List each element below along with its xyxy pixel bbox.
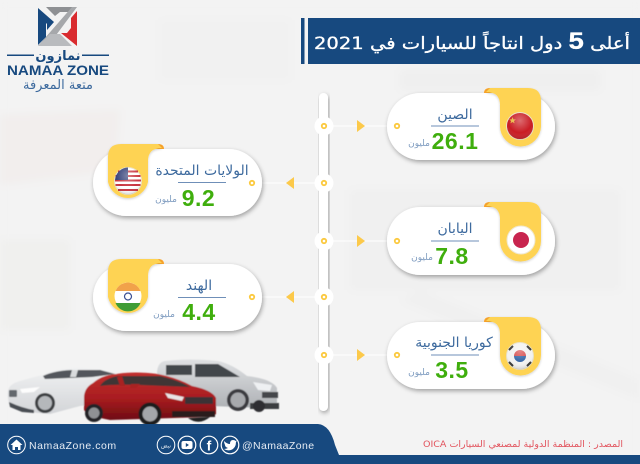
- ribbon: [484, 202, 541, 262]
- cars illustration: [8, 360, 279, 426]
- unit: مليون: [411, 253, 433, 263]
- icon: youtube: [178, 436, 196, 454]
- ribbon: [484, 317, 541, 375]
- value: 26.1: [432, 128, 478, 154]
- logo wordmark: NAMAA ZONE: [7, 63, 109, 78]
- logo tagline: متعة المعرفة: [23, 78, 93, 93]
- timeline nodes: [314, 116, 334, 364]
- flag: China: [506, 112, 534, 140]
- timeline spine: [314, 93, 334, 411]
- value: 4.4: [182, 299, 216, 325]
- card: South Korea: [387, 317, 555, 389]
- name: الصين: [437, 107, 473, 123]
- logo mark: [38, 7, 77, 46]
- unit: مليون: [408, 368, 430, 378]
- title text: أعلى 5 دول انتاجاً للسيارات في 2021: [314, 28, 630, 55]
- website link: NamaaZone.com: [29, 440, 117, 452]
- value: 9.2: [182, 185, 215, 211]
- ribbon: [108, 144, 164, 198]
- title banner: [301, 18, 640, 64]
- car: silver SUV: [157, 360, 279, 412]
- social handles: @NamaaZone: [242, 440, 314, 452]
- name: الولايات المتحدة: [155, 163, 249, 179]
- flag: USA: [114, 168, 142, 194]
- flag: India: [114, 282, 142, 311]
- ribbon: [484, 88, 541, 146]
- social handles: [157, 436, 314, 454]
- flag: Japan: [507, 226, 535, 254]
- name: الهند: [186, 278, 212, 294]
- card: USA: [93, 144, 262, 216]
- icon: facebook: f: [207, 438, 212, 454]
- card dot: [250, 295, 254, 299]
- card: China: [387, 88, 555, 160]
- unit: مليون: [408, 139, 430, 149]
- flag: South Korea: [506, 342, 534, 370]
- icon: basis: [157, 436, 175, 454]
- card dot: [395, 124, 399, 128]
- car: red sedan: [84, 372, 216, 426]
- unit: مليون: [155, 195, 177, 205]
- name: كوريا الجنوبية: [415, 335, 493, 351]
- ribbon: [108, 259, 164, 313]
- card: India: [93, 259, 262, 331]
- name: اليابان: [437, 221, 473, 237]
- unit: مليون: [153, 310, 175, 320]
- car: white sedan: [8, 368, 118, 414]
- logo lines and Arabic name: نمازون: [35, 49, 81, 64]
- value: 7.8: [435, 243, 469, 269]
- card dot: [395, 353, 399, 357]
- source note: المصدر : المنظمة الدولية لمصنعي السيارات OICA: [423, 440, 623, 450]
- connector arrows: [262, 120, 390, 361]
- card dot: [250, 181, 254, 185]
- card: Japan: [387, 202, 555, 275]
- logo: [7, 7, 109, 93]
- card dot: [395, 239, 399, 243]
- footer band: [0, 424, 640, 464]
- icon: facebook: [200, 436, 218, 454]
- icon: home: [8, 436, 25, 454]
- icon: twitter: [221, 436, 239, 454]
- value: 3.5: [435, 357, 469, 383]
- icon: basis: نبض: [161, 444, 171, 450]
- website link: [8, 436, 117, 454]
